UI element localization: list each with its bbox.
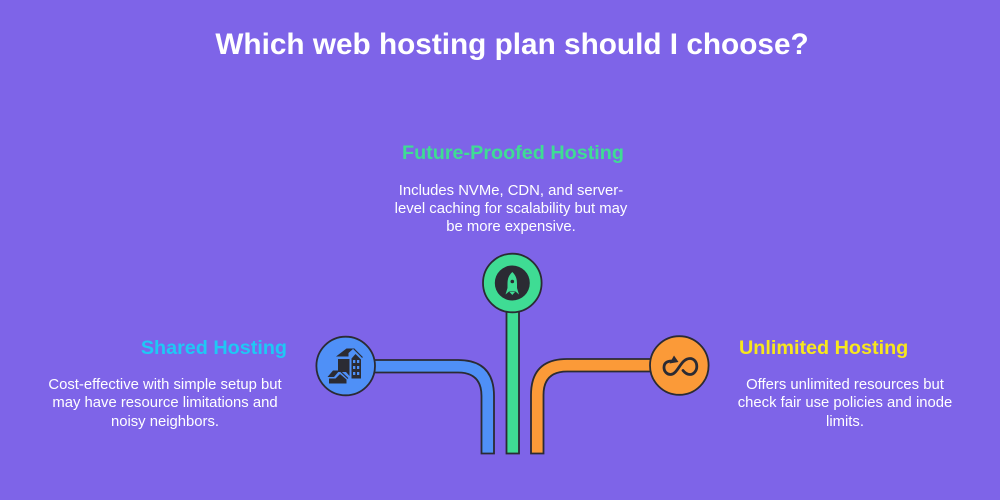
heading: future-proofed hosting: Future-Proofed Hosting xyxy=(402,142,624,164)
text: shared description: noisy neighbors. xyxy=(111,414,219,430)
text: shared description xyxy=(48,377,282,430)
text: unlimited description: check fair use policies and inode xyxy=(738,395,952,411)
text: future-proofed description xyxy=(395,182,628,235)
pipe: green xyxy=(506,308,519,454)
text: unlimited description: Offers unlimited resources but xyxy=(746,377,944,393)
heading: shared hosting: Shared Hosting xyxy=(141,336,287,358)
pipe: blue xyxy=(372,360,494,454)
panel: shared hosting text xyxy=(48,336,287,430)
text: unlimited description xyxy=(738,377,952,430)
icon: buildings in blue circle xyxy=(316,337,375,395)
text: future-proofed description: Includes NVMe, CDN, and server- xyxy=(399,182,623,198)
icon: rocket in green circle xyxy=(483,254,542,312)
text: shared description: Cost-effective with simple setup but xyxy=(48,377,282,393)
panel: future-proofed hosting text xyxy=(395,142,628,235)
heading: unlimited hosting: Unlimited Hosting xyxy=(739,336,908,358)
panel: unlimited hosting text xyxy=(738,336,952,430)
icon: infinity loop in orange circle xyxy=(650,336,709,395)
text: shared description: may have resource limitations and xyxy=(52,395,278,411)
text: future-proofed description: be more expensive. xyxy=(446,219,576,235)
pipe: orange xyxy=(531,359,652,454)
text: future-proofed description: level caching for scalability but may xyxy=(395,201,627,217)
title: Which web hosting plan should I choose? xyxy=(215,28,809,60)
text: unlimited description: limits. xyxy=(826,414,864,430)
